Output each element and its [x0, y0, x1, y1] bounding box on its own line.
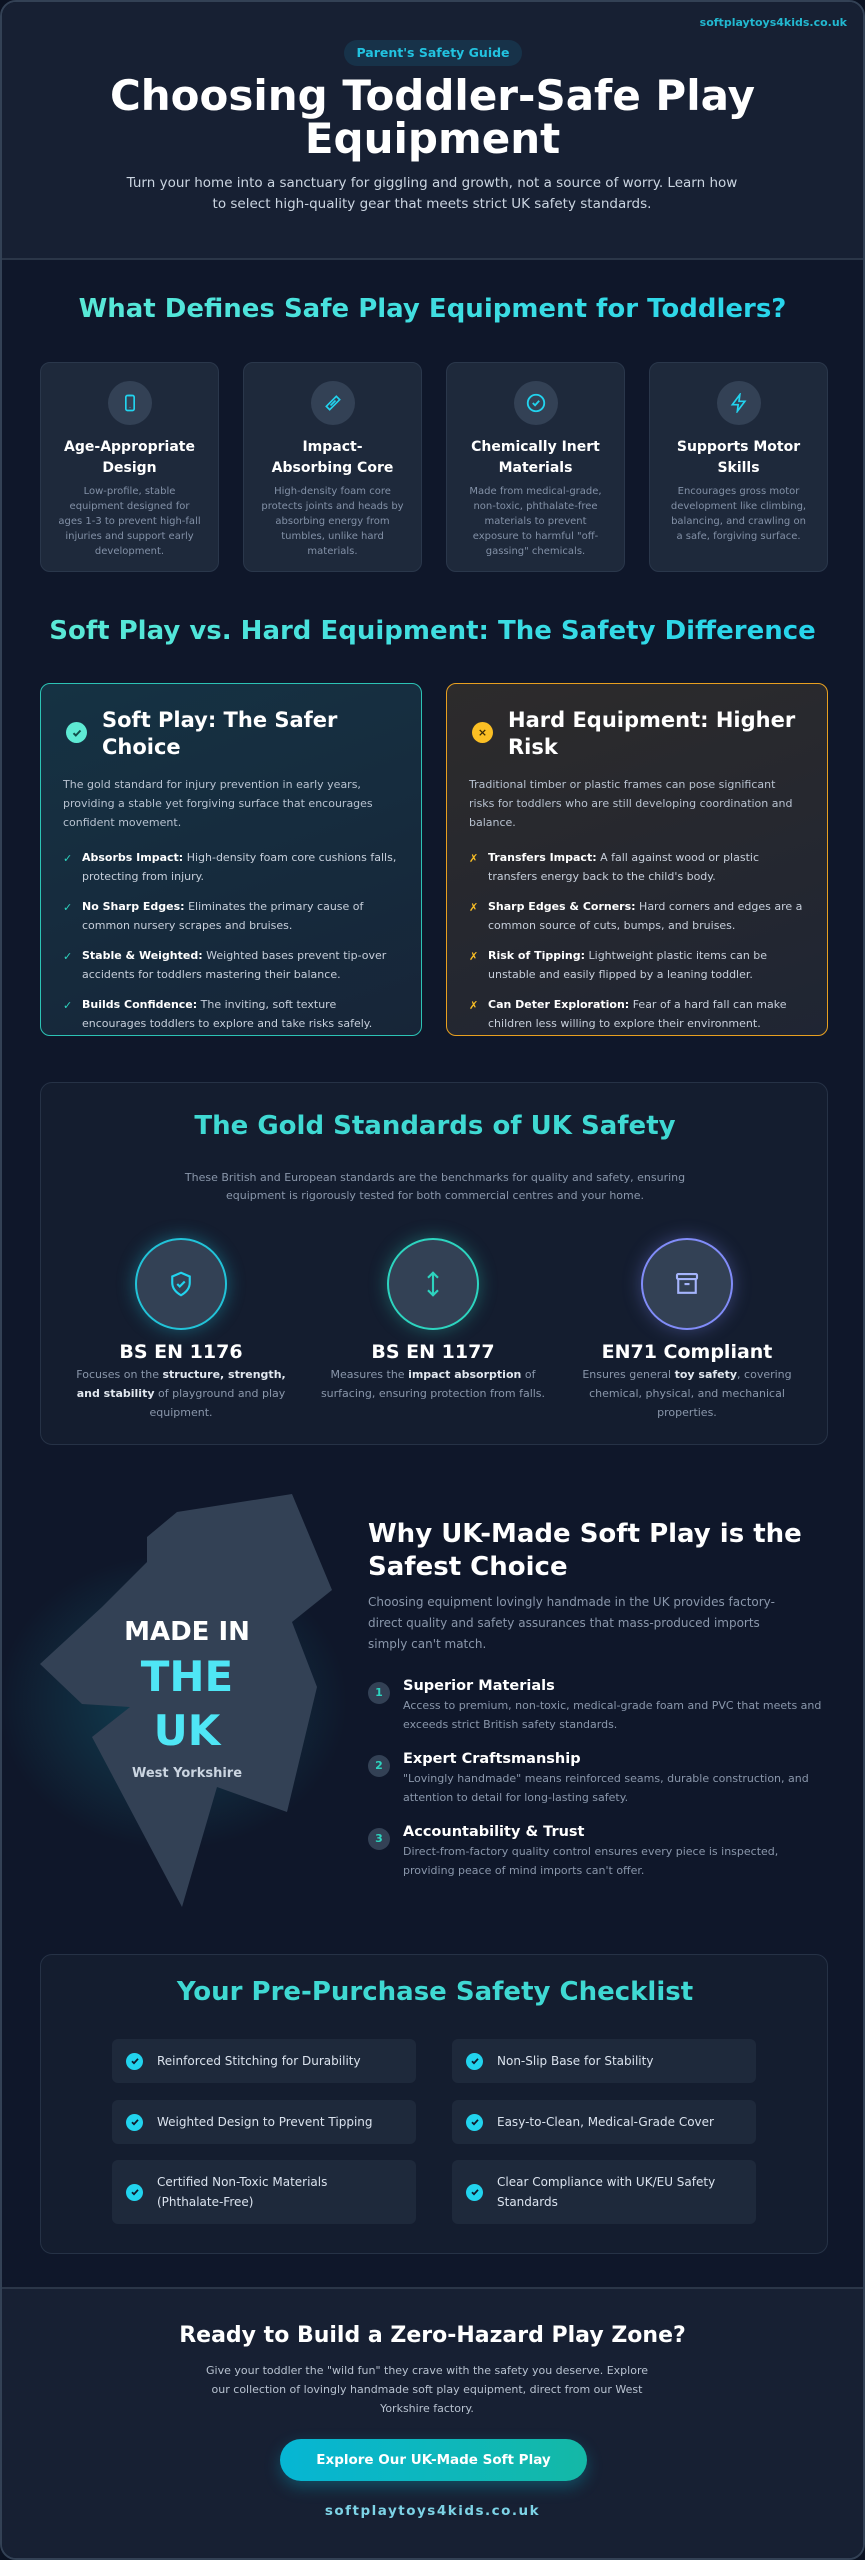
standard: BS EN 1176: [76, 1230, 286, 1419]
intro: These British and European standards are the benchmarks for quality and safety, ensuring equipment is rigorously tested for both commercial centres and your home.: [185, 1171, 685, 1202]
standard: BS EN 1177: [321, 1230, 545, 1400]
heading: Why UK-made: Why UK-Made Soft Play is the Safest Choice: [368, 1519, 802, 1582]
panel: gold standards: [40, 1082, 828, 1445]
standard: BS EN 1176: BS EN 1176: [119, 1341, 243, 1363]
panel: soft play: ✓: [63, 901, 72, 914]
item 1: Superior Materials: [403, 1678, 555, 1694]
icon: check circle: [514, 381, 558, 425]
text: Easy-to-Clean, Medical-Grade Cover: [497, 2115, 714, 2129]
item 1: [368, 1678, 821, 1731]
button: [280, 2439, 587, 2481]
panel: soft play: Soft Play: The Safer Choice: [102, 708, 337, 759]
item 2: "Lovingly handmade" means reinforced seams, durable construction, and attention to detail for long-lasting safety.: [403, 1772, 809, 1804]
card: chemically inert: Made from medical-grade, non-toxic, phthalate-free materials to prevent exposure to harmful "off-gassing" chemicals.: [469, 486, 602, 557]
panel: hard equipment: Hard Equipment: Higher Risk: [508, 708, 795, 759]
text: UK intro: Choosing equipment lovingly handmade in the UK provides factory-direct quality and safety assurances that mass-produced imports simply can't match.: [368, 1595, 775, 1651]
text: Clear Compliance with UK/EU Safety Standards: [497, 2175, 715, 2209]
standard: EN71: EN71 Compliant: [602, 1341, 772, 1363]
card: age appropriate: Low-profile, stable equipment designed for ages 1-3 to prevent high-fall injuries and support early development.: [58, 486, 201, 557]
panel: hard equipment: [446, 683, 828, 1036]
heading: The Gold Standards of UK Safety: [194, 1111, 676, 1141]
panel: hard equipment: Transfers Impact: A fall against wood or plastic transfers energy back to the child's body.: [488, 851, 759, 883]
panel: soft play: Stable & Weighted: Weighted bases prevent tip-over accidents for toddlers mastering their balance.: [82, 949, 386, 981]
icon: x: [472, 722, 493, 743]
item 2: 2: [375, 1759, 383, 1772]
button: Explore Our UK-Made Soft Play: [316, 2452, 551, 2468]
item 3: 3: [375, 1832, 383, 1845]
icon: box: [641, 1238, 733, 1330]
panel: soft play: ✓: [63, 999, 72, 1012]
icon: bolt: [716, 381, 760, 425]
icon: link: [310, 381, 354, 425]
heading: What Defines: What Defines Safe Play Equipment for Toddlers?: [79, 294, 786, 324]
standard: BS EN 1176: Focuses on the structure, strength, and stability of playground and play equipment.: [76, 1368, 286, 1419]
heading: Soft vs Hard: Soft Play vs. Hard Equipment: The Safety Difference: [49, 616, 816, 646]
card: chemically inert: [446, 362, 625, 572]
icon: x: ×: [478, 726, 487, 739]
pill: Parent's Safety Guide: Parent's Safety Guide: [356, 45, 510, 60]
panel: hard equipment: ✗: [469, 852, 478, 865]
panel: hard equipment: ✗: [469, 950, 478, 963]
footer CTA: [2, 2287, 863, 2560]
item 2: Expert Craftsmanship: [403, 1751, 581, 1767]
card: motor skills: Encourages gross motor development like climbing, balancing, and crawling on a safe, forgiving surface.: [671, 486, 806, 542]
item 2: [368, 1751, 809, 1804]
text: Weighted Design to Prevent Tipping: [157, 2115, 373, 2129]
icon: check: [66, 722, 87, 743]
panel: soft play: ✓: [63, 950, 72, 963]
header: [2, 2, 863, 260]
panel: checklist: [40, 1954, 828, 2254]
item 1: 1: [375, 1686, 383, 1699]
card: chemically inert: Chemically Inert Materials: [471, 439, 600, 476]
CTA text: Give your toddler the "wild fun" they crave with the safety you deserve. Explore our collection of lovingly handmade soft play equipment, direct from our West Yorkshire factory.: [206, 2364, 648, 2415]
card: impact absorbing: [243, 362, 422, 572]
title: Equipment: [305, 114, 560, 163]
graphic: UK map made in the UK: [30, 1494, 332, 1907]
subtitle: Turn your home into a sanctuary for giggling and growth, not a source of worry. Learn how to select high-quality gear that meets strict UK safety standards.: [127, 175, 737, 212]
item 1: Access to premium, non-toxic, medical-grade foam and PVC that meets and exceeds strict British safety standards.: [403, 1699, 821, 1731]
panel: soft play: Absorbs Impact: High-density foam core cushions falls, protecting from injury.: [82, 851, 396, 883]
card: impact absorbing: Absorbing Core: [272, 460, 393, 476]
check items: [112, 2039, 416, 2083]
card: impact absorbing: High-density foam core protects joints and heads by absorbing energy from tumbles, unlike hard materials.: [261, 486, 404, 557]
CTA heading: Ready to Build a Zero-Hazard Play Zone?: [179, 2323, 686, 2348]
graphic: UK map made in the UK: West Yorkshire: [132, 1766, 242, 1781]
panel: hard equipment: ✗: [469, 901, 478, 914]
panel: soft play: Builds Confidence: The inviting, soft texture encourages toddlers to explore and take risks safely.: [82, 998, 372, 1030]
card: age appropriate: Age-Appropriate Design: [64, 439, 195, 476]
card: impact absorbing: Impact-: [302, 439, 363, 455]
card: motor skills: Supports Motor Skills: [677, 439, 800, 476]
title: Choosing Toddler-Safe Play: [110, 71, 755, 120]
standard: EN71: [582, 1229, 792, 1419]
pill: Parent's Safety Guide: [344, 40, 522, 66]
card: age appropriate: [40, 362, 219, 572]
icon: shield: [135, 1238, 227, 1330]
title: [110, 71, 755, 163]
graphic: UK map made in the UK: MADE IN: [124, 1617, 250, 1647]
graphic: UK map made in the UK: THE: [141, 1652, 233, 1701]
panel: hard equipment: Sharp Edges & Corners: Hard corners and edges are a common source of cuts, bumps, and bruises.: [488, 900, 802, 932]
panel: hard equipment: Can Deter Exploration: Fear of a hard fall can make children less willing to explore their environment.: [488, 998, 786, 1030]
item 3: Direct-from-factory quality control ensures every piece is inspected, providing peace of mind imports can't offer.: [403, 1845, 778, 1877]
panel: hard equipment: Risk of Tipping: Lightweight plastic items can be unstable and easily flipped by a leaning toddler.: [488, 949, 767, 981]
heading: Your Pre-Purchase Safety Checklist: [177, 1977, 693, 2007]
card: motor skills: [649, 362, 828, 572]
panel: soft play: No Sharp Edges: Eliminates the primary cause of common nursery scrapes and bruises.: [82, 900, 363, 932]
panel: soft play: [40, 683, 422, 1036]
item 3: Accountability & Trust: [403, 1824, 584, 1840]
graphic: UK map made in the UK: UK: [154, 1706, 220, 1755]
check items: Reinforced Stitching for Durability: [157, 2054, 361, 2068]
text: (Phthalate-Free): [157, 2195, 253, 2209]
text: Certified Non-Toxic Materials: [157, 2175, 327, 2189]
standard: BS EN 1177: BS EN 1177: [371, 1341, 495, 1363]
standard: EN71: Ensures general toy safety, covering chemical, physical, and mechanical properties.: [582, 1368, 792, 1419]
icon: phone: [108, 381, 152, 425]
standard: BS EN 1177: Measures the impact absorption of surfacing, ensuring protection from falls.: [321, 1368, 545, 1400]
brand url: softplaytoys4kids.co.uk: [700, 16, 847, 29]
text: Non-Slip Base for Stability: [497, 2054, 653, 2068]
panel: soft play: ✓: [63, 852, 72, 865]
item 3: [368, 1824, 778, 1877]
footer url: softplaytoys4kids.co.uk: [325, 2503, 540, 2519]
panel: hard equipment: ✗: [469, 999, 478, 1012]
panel: soft play: The gold standard for injury prevention in early years, providing a stable yet forgiving surface that encourages confident movement.: [63, 778, 373, 829]
panel: hard equipment: Traditional timber or plastic frames can pose significant risks for toddlers who are still developing coordination and balance.: [469, 778, 792, 829]
icon: arrows: [387, 1238, 479, 1330]
